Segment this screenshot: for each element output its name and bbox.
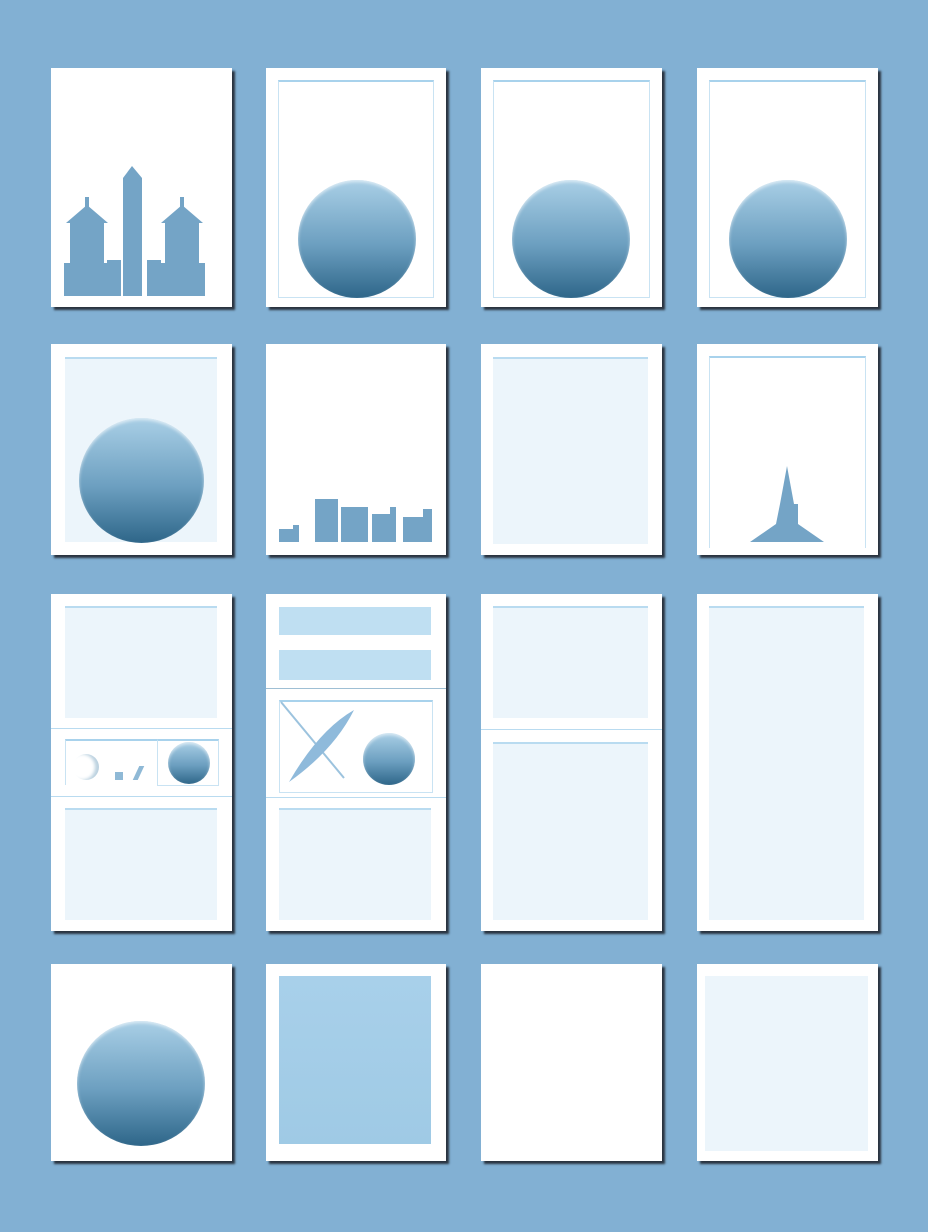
card: r1c4 bbox=[697, 68, 878, 307]
circle bbox=[79, 418, 204, 543]
card: r4c3 bbox=[481, 964, 662, 1161]
card: r3c4 bbox=[697, 594, 878, 931]
icon: spire bbox=[750, 466, 824, 542]
icons: small shapes bbox=[73, 754, 99, 780]
bars bbox=[279, 607, 431, 635]
circle bbox=[512, 180, 630, 298]
card: r3c3 bbox=[481, 594, 662, 931]
card: r1c3 bbox=[481, 68, 662, 307]
card: r4c1 bbox=[51, 964, 232, 1161]
card: r3c1 bbox=[51, 594, 232, 931]
circle bbox=[363, 733, 415, 785]
circle bbox=[298, 180, 416, 298]
card: r3c2 bbox=[266, 594, 446, 931]
card: r1c1 buildings bbox=[51, 68, 232, 307]
circle bbox=[77, 1021, 205, 1146]
icon: X bbox=[280, 702, 354, 782]
circle bbox=[729, 180, 847, 298]
circle bbox=[168, 742, 210, 784]
card: r4c2 bbox=[266, 964, 446, 1161]
icon: buildings bbox=[64, 166, 205, 296]
card: r2c1 bbox=[51, 344, 232, 555]
card: r2c2 skyline bbox=[266, 344, 446, 555]
card: r2c3 bbox=[481, 344, 662, 555]
icon: skyline bbox=[279, 499, 432, 542]
card: r1c2 bbox=[266, 68, 446, 307]
card: r2c4 spire bbox=[697, 344, 878, 555]
card: r4c4 bbox=[697, 964, 878, 1161]
